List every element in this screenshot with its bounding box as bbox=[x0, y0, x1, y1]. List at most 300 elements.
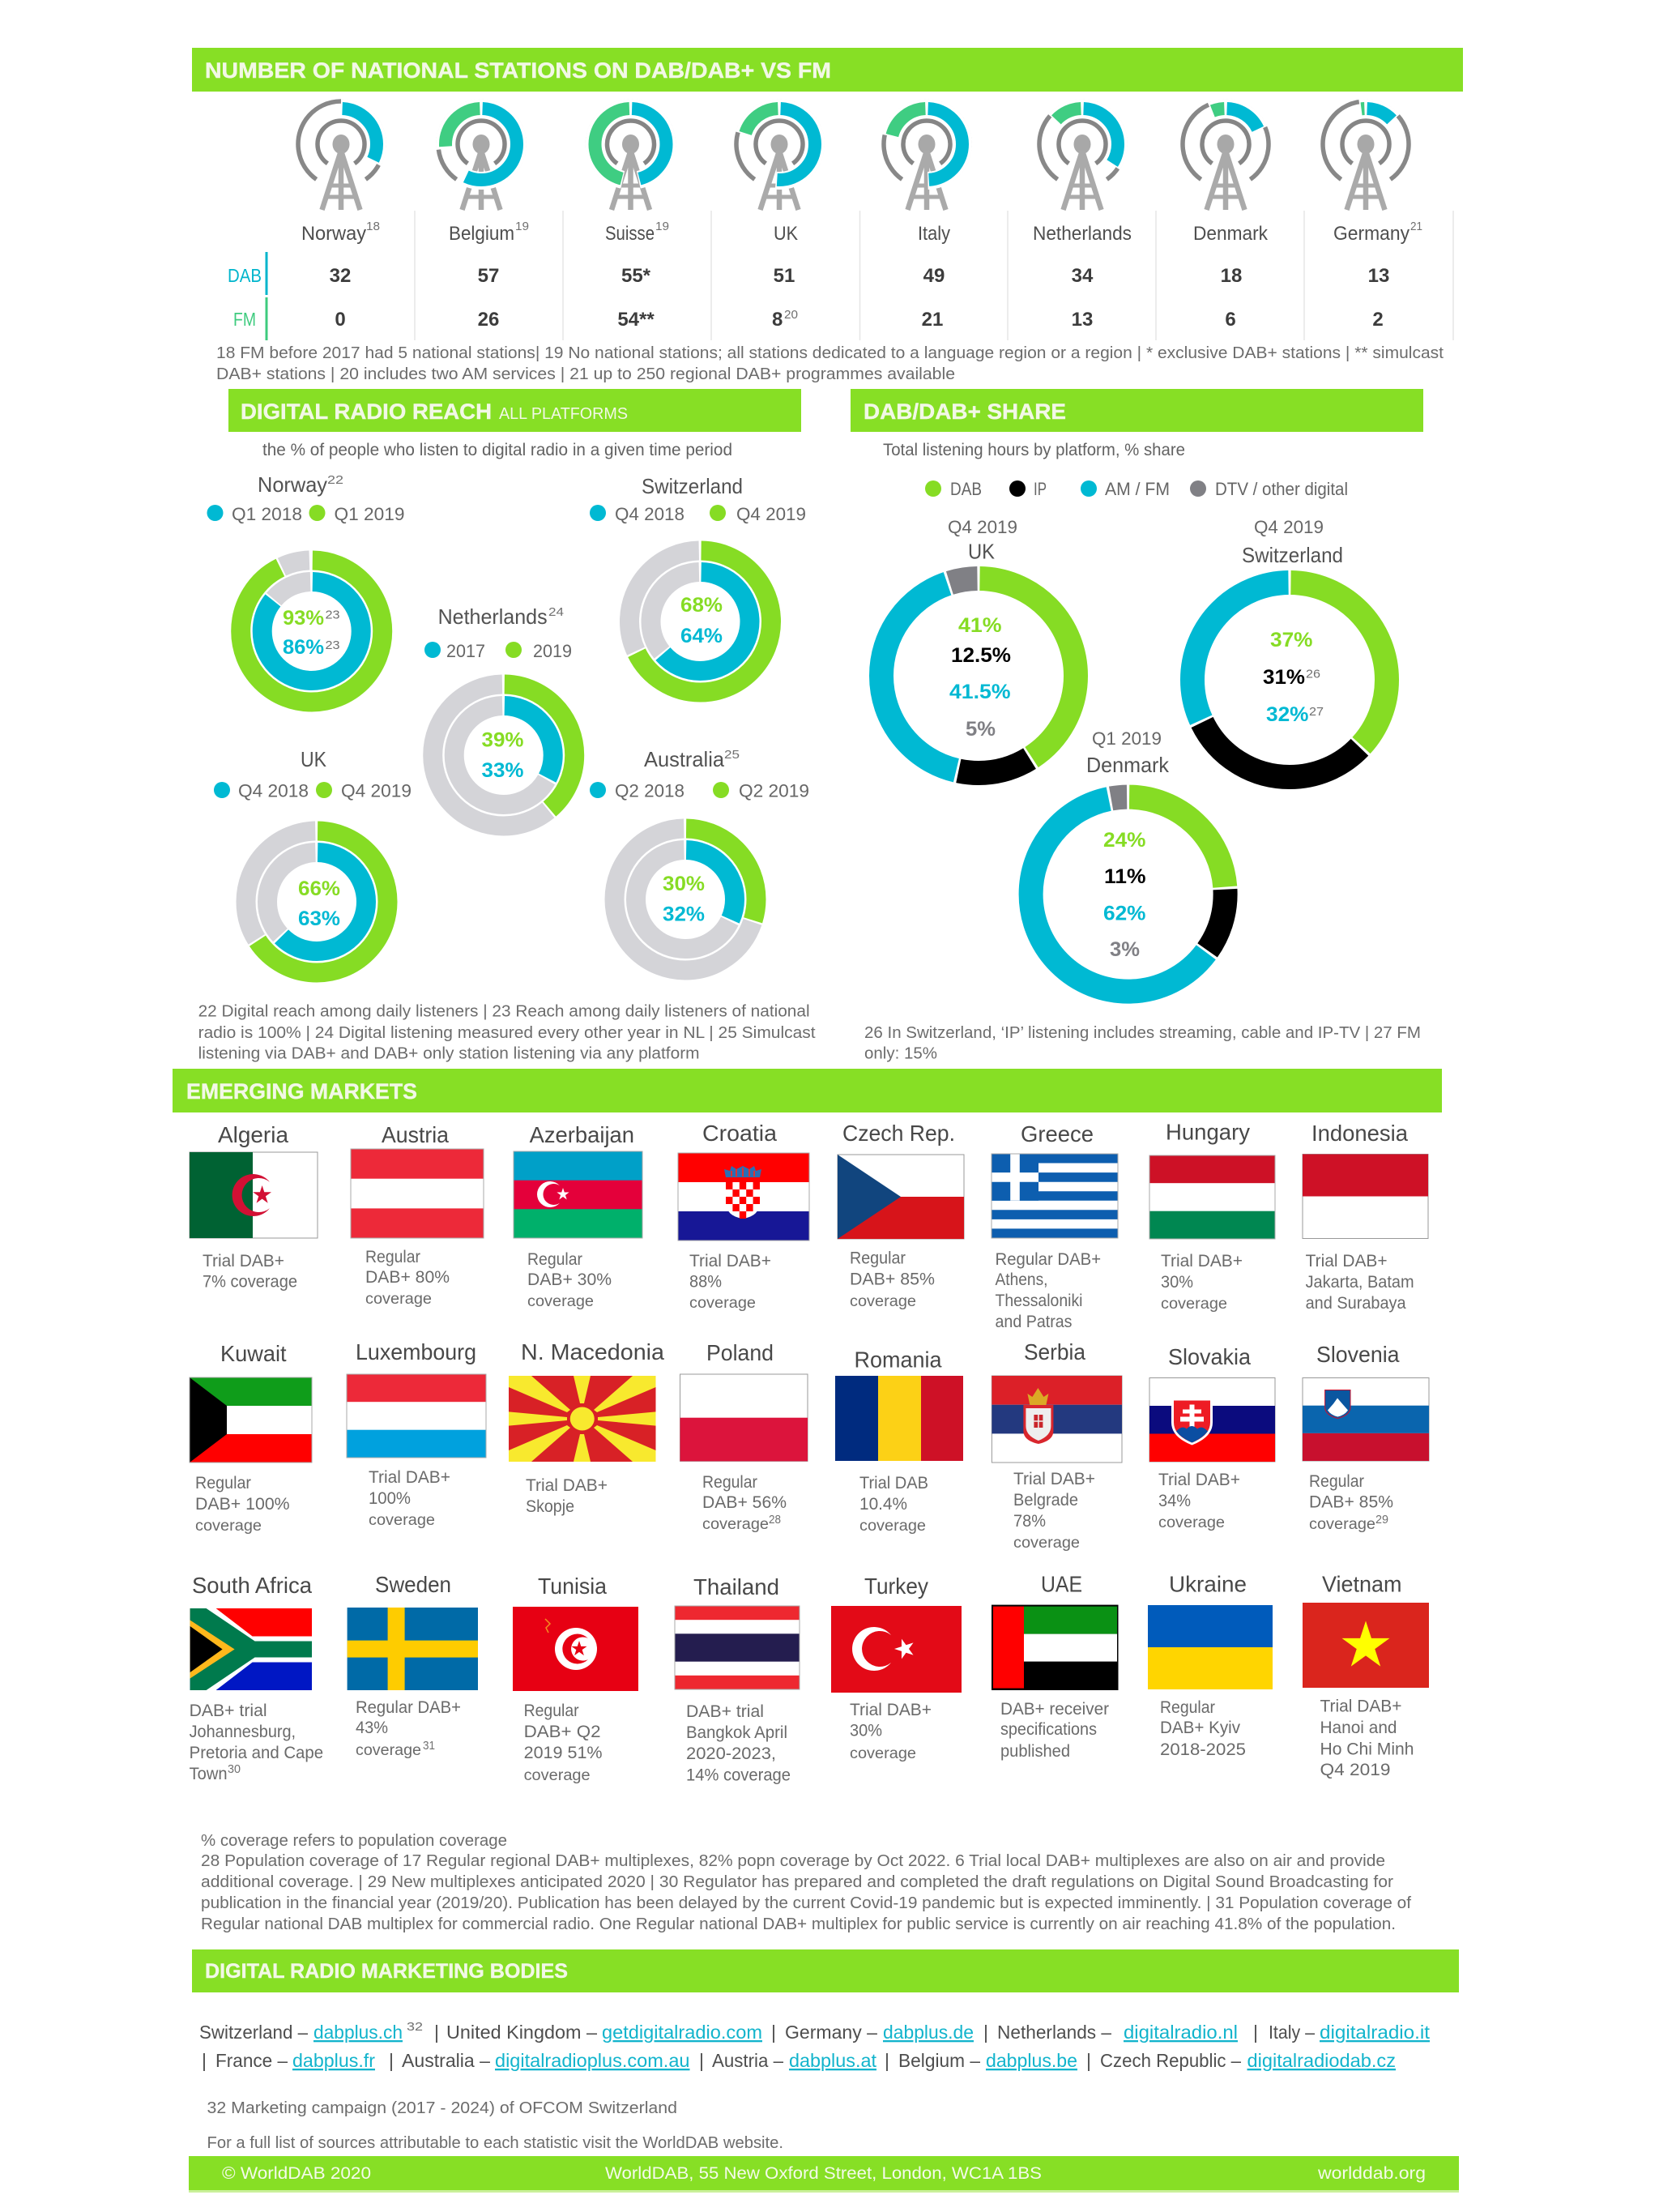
footnote: marketing: 32 Marketing campaign (2017 - 2024) of OFCOM Switzerland bbox=[207, 2099, 677, 2117]
chart: Switzerland reach: Q4 2019 bbox=[736, 504, 806, 524]
market: Azerbaijan: coverage bbox=[527, 1293, 594, 1310]
market: Turkey: Trial DAB+ bbox=[850, 1701, 932, 1719]
chart: Australia bbox=[590, 747, 809, 971]
DAB values: 57 bbox=[478, 265, 499, 287]
FM values: 21 bbox=[922, 309, 943, 331]
market: Poland: Regular bbox=[702, 1473, 757, 1492]
country labels row: Germany bbox=[1333, 223, 1410, 245]
links row one: Switzerland – bbox=[199, 2022, 308, 2043]
market: Austria: Austria bbox=[382, 1122, 449, 1147]
market: Romania: Trial DAB bbox=[859, 1474, 928, 1492]
market: Thailand: 2020-2023, bbox=[686, 1744, 776, 1763]
heading: national stations: NUMBER OF NATIONAL STATIONS ON DAB/DAB+ VS FM bbox=[205, 58, 831, 83]
chart: UK reach: Q4 2019 bbox=[341, 781, 412, 801]
market: Czech Republic: Czech Rep. bbox=[842, 1121, 955, 1146]
links row one: dabplus.de bbox=[883, 2022, 974, 2043]
chart: UK reach: UK bbox=[301, 747, 327, 771]
DAB values: 49 bbox=[923, 265, 945, 287]
chart: Netherlands: 24 bbox=[548, 605, 564, 619]
market: Slovakia bbox=[1149, 1344, 1275, 1531]
chart: Norway: Norway bbox=[258, 472, 327, 497]
market: N. Macedonia: Skopje bbox=[526, 1497, 574, 1516]
market: Austria: Regular bbox=[365, 1248, 420, 1266]
market: Serbia: 78% bbox=[1013, 1512, 1046, 1531]
market: South Africa: Pretoria and Cape bbox=[190, 1744, 323, 1762]
chart: Denmark share: 24% bbox=[1103, 829, 1145, 852]
chart: UK reach: 63% bbox=[298, 907, 340, 930]
market: Tunisia: 2019 51% bbox=[524, 1744, 603, 1762]
chart: UK reach bbox=[214, 747, 412, 972]
market: Hungary bbox=[1149, 1120, 1275, 1313]
links row two: | bbox=[885, 2050, 889, 2071]
market: Tunisia bbox=[513, 1574, 638, 1784]
chart: Denmark share: Denmark bbox=[1086, 753, 1170, 777]
chart: Netherlands: 33% bbox=[481, 759, 523, 782]
panel: digital radio reach bbox=[198, 389, 816, 1063]
footnote: coverage: % coverage refers to population coverage bbox=[201, 1832, 507, 1850]
subtitle: reach: the % of people who listen to digital radio in a given time period bbox=[262, 441, 732, 459]
market: Kuwait: coverage bbox=[195, 1518, 262, 1535]
market: Indonesia: Jakarta, Batam bbox=[1306, 1273, 1414, 1292]
market: Hungary: Hungary bbox=[1166, 1120, 1250, 1144]
icon: tower Denmark bbox=[1183, 101, 1269, 210]
market: Thailand bbox=[675, 1574, 800, 1785]
market: Indonesia: and Surabaya bbox=[1306, 1294, 1406, 1313]
market: Luxembourg: Luxembourg bbox=[356, 1339, 476, 1364]
links row one: United Kingdom – bbox=[446, 2022, 597, 2043]
market: Tunisia: Tunisia bbox=[538, 1574, 607, 1599]
chart: Norway: Q1 2018 bbox=[232, 504, 302, 524]
market: Greece: Athens, bbox=[995, 1270, 1048, 1289]
market: Greece: Greece bbox=[1021, 1121, 1094, 1147]
chart: Switzerland reach: Switzerland bbox=[642, 474, 743, 498]
market: Turkey: 30% bbox=[850, 1721, 882, 1740]
market: UAE: published bbox=[1000, 1742, 1070, 1761]
footnote: reach: 22 Digital reach among daily listeners | 23 Reach among daily listeners of national bbox=[198, 1003, 810, 1021]
market: Vietnam: Q4 2019 bbox=[1320, 1761, 1390, 1779]
chart: Switzerland share: 26 bbox=[1306, 668, 1320, 681]
market: Kuwait bbox=[190, 1341, 312, 1535]
chart: UK reach: 66% bbox=[298, 878, 340, 900]
market: N. Macedonia bbox=[509, 1339, 664, 1516]
market: Slovakia: Slovakia bbox=[1168, 1344, 1251, 1369]
market: Czech Republic bbox=[838, 1121, 964, 1310]
links row two: | bbox=[1086, 2050, 1091, 2071]
market: Luxembourg bbox=[347, 1339, 486, 1529]
market: Slovenia: Regular bbox=[1309, 1472, 1364, 1491]
market: Croatia: coverage bbox=[689, 1295, 756, 1312]
FM values: 26 bbox=[478, 309, 499, 331]
market: Greece: Thessaloniki bbox=[995, 1292, 1082, 1310]
icon: tower Belgium bbox=[438, 101, 524, 210]
links row one: | bbox=[771, 2022, 776, 2043]
market: Thailand: 14% coverage bbox=[686, 1766, 791, 1785]
links row one: 32 bbox=[407, 2020, 423, 2034]
DAB values: 32 bbox=[330, 265, 351, 287]
DAB values: 18 bbox=[1221, 265, 1242, 287]
chart: Norway: 22 bbox=[327, 473, 343, 487]
market: Vietnam bbox=[1303, 1572, 1429, 1779]
row label: FM: FM bbox=[233, 309, 256, 330]
market: Algeria: Algeria bbox=[218, 1122, 288, 1147]
links row one: Germany – bbox=[785, 2022, 877, 2043]
chart: Norway: 23 bbox=[326, 609, 340, 622]
market: Romania: coverage bbox=[859, 1518, 926, 1535]
icon: tower Germany bbox=[1323, 101, 1409, 210]
links row two: Czech Republic – bbox=[1100, 2050, 1241, 2071]
chart: Switzerland share: Q4 2019 bbox=[1254, 517, 1324, 537]
market: Serbia: Belgrade bbox=[1013, 1491, 1078, 1510]
legend: platforms: AM / FM bbox=[1105, 479, 1170, 499]
chart: Denmark share: 11% bbox=[1104, 865, 1145, 888]
market: Luxembourg: 100% bbox=[369, 1489, 411, 1508]
market: South Africa: Johannesburg, bbox=[190, 1723, 296, 1741]
icon: tower UK bbox=[736, 101, 822, 210]
footer bar: WorldDAB, 55 New Oxford Street, London, WC1A 1BS bbox=[605, 2164, 1042, 2183]
market: Sweden: Sweden bbox=[375, 1572, 451, 1597]
country labels row: 18 bbox=[366, 220, 380, 233]
FM values: 54** bbox=[617, 309, 655, 331]
market: Kuwait: Regular bbox=[195, 1474, 251, 1492]
panel: emerging markets bbox=[173, 1069, 1442, 1933]
country labels row: 19 bbox=[515, 220, 529, 233]
footnote: coverage bbox=[201, 1832, 1411, 1933]
market: Sweden: 31 bbox=[423, 1739, 435, 1753]
market: Romania bbox=[835, 1347, 963, 1535]
market: Poland: Poland bbox=[706, 1340, 774, 1365]
country labels row: 21 bbox=[1410, 220, 1422, 233]
market: Slovakia: 34% bbox=[1158, 1492, 1191, 1510]
country labels row bbox=[301, 220, 1422, 245]
FM values: 8 bbox=[772, 309, 783, 331]
links row two: dabplus.be bbox=[986, 2050, 1077, 2071]
chart: Australia: 32% bbox=[663, 903, 705, 925]
legend: platforms: DAB bbox=[950, 479, 982, 499]
row label: DAB bbox=[228, 252, 267, 295]
market: Sweden bbox=[348, 1572, 478, 1759]
market: Austria: DAB+ 80% bbox=[365, 1268, 450, 1287]
links row one: dabplus.ch bbox=[313, 2022, 403, 2043]
chart: Netherlands bbox=[424, 604, 574, 826]
market: Slovenia: coverage bbox=[1309, 1516, 1375, 1533]
panel: DAB share bbox=[851, 389, 1423, 1063]
links row one: digitalradio.it bbox=[1320, 2022, 1431, 2043]
chart: Denmark share: 3% bbox=[1110, 938, 1140, 961]
market: Poland: 28 bbox=[769, 1513, 781, 1527]
footer bar bbox=[189, 2156, 1459, 2193]
market: N. Macedonia: N. Macedonia bbox=[521, 1339, 664, 1364]
footnote: coverage: publication in the financial year (2019/20). Publication has been delayed by the current Covid-19 pandemic but is expected imminently. | 31 Population coverage of bbox=[201, 1894, 1411, 1912]
chart: Norway: 86% bbox=[283, 636, 324, 659]
market: Vietnam: Hanoi and bbox=[1320, 1719, 1397, 1737]
chart: UK reach: Q4 2018 bbox=[238, 781, 309, 801]
chart: Switzerland reach: 64% bbox=[680, 625, 723, 647]
market: Slovenia bbox=[1303, 1342, 1429, 1533]
country labels row: Belgium bbox=[449, 223, 514, 245]
chart: Norway: 93% bbox=[283, 607, 324, 630]
links row two: | bbox=[202, 2050, 207, 2071]
sources note: For a full list of sources attributable to each statistic visit the WorldDAB website. bbox=[207, 2134, 783, 2152]
market: Turkey: Turkey bbox=[864, 1574, 928, 1599]
market: Greece: Regular DAB+ bbox=[995, 1250, 1101, 1269]
chart: Australia: Australia bbox=[644, 747, 725, 771]
heading: national stations bbox=[192, 48, 1463, 92]
panel: digital radio marketing bodies bbox=[192, 1949, 1459, 2152]
DAB values: 34 bbox=[1072, 265, 1094, 287]
market: Azerbaijan: DAB+ 30% bbox=[527, 1270, 612, 1289]
market: Croatia bbox=[678, 1121, 809, 1312]
market: Slovenia: 29 bbox=[1375, 1513, 1388, 1527]
footnote: reach bbox=[198, 1003, 816, 1063]
market: Romania: Romania bbox=[854, 1347, 942, 1373]
FM values: 6 bbox=[1225, 309, 1236, 331]
heading: digital radio reach: DIGITAL RADIO REACH bbox=[241, 399, 492, 424]
icon: tower Norway bbox=[298, 101, 384, 210]
chart: Australia: Q2 2019 bbox=[739, 781, 809, 801]
market: Poland: DAB+ 56% bbox=[702, 1493, 787, 1512]
country labels row: 19 bbox=[655, 220, 669, 233]
footnote: stations bbox=[216, 344, 1444, 383]
footnote: stations: DAB+ stations | 20 includes two AM services | 21 up to 250 regional DAB+ programmes available bbox=[216, 365, 955, 383]
footnote: coverage: Regular national DAB multiplex for commercial radio. One Regular national DAB+ multiplex for public service is currently on air reaching 41.8% of the population. bbox=[201, 1915, 1396, 1933]
footnote: coverage: additional coverage. | 29 New multiplexes anticipated 2020 | 30 Regulator has prepared and completed the draft regulations on Digital Sound Broadcasting for bbox=[201, 1873, 1393, 1891]
market: UAE: specifications bbox=[1000, 1720, 1097, 1739]
market: Algeria: 7% coverage bbox=[203, 1272, 297, 1292]
market: Indonesia bbox=[1303, 1121, 1428, 1313]
market: Hungary: coverage bbox=[1161, 1296, 1227, 1313]
chart: UK share: UK bbox=[968, 540, 996, 564]
chart: Norway: 23 bbox=[326, 638, 340, 652]
heading: emerging markets: EMERGING MARKETS bbox=[186, 1079, 417, 1104]
footnote: stations: 18 FM before 2017 had 5 national stations| 19 No national stations; all stations dedicated to a language region or a region | * exclusive DAB+ stations | ** simulcast bbox=[216, 344, 1444, 362]
footer bar: © WorldDAB 2020 bbox=[222, 2164, 371, 2183]
FM values: 2 bbox=[1372, 309, 1384, 331]
market: Serbia: coverage bbox=[1013, 1535, 1080, 1552]
market: Slovenia: DAB+ 85% bbox=[1309, 1492, 1393, 1511]
country labels row: Netherlands bbox=[1033, 223, 1132, 245]
FM values: 20 bbox=[784, 308, 798, 322]
market: Algeria: Trial DAB+ bbox=[203, 1252, 284, 1270]
market: Hungary: Trial DAB+ bbox=[1161, 1252, 1243, 1270]
market: N. Macedonia: Trial DAB+ bbox=[526, 1476, 608, 1495]
DAB values: 55* bbox=[621, 265, 651, 287]
market: UAE bbox=[992, 1572, 1118, 1761]
heading: marketing bodies: DIGITAL RADIO MARKETING BODIES bbox=[205, 1960, 568, 1983]
market: Vietnam: Ho Chi Minh bbox=[1320, 1740, 1414, 1758]
country labels row: Italy bbox=[918, 223, 950, 245]
chart: UK share bbox=[881, 517, 1076, 773]
chart: Switzerland share bbox=[1192, 517, 1387, 777]
links row two: France – bbox=[215, 2050, 288, 2071]
heading: emerging markets bbox=[173, 1069, 1442, 1112]
heading: marketing bodies bbox=[192, 1949, 1459, 1992]
chart: Denmark share: 62% bbox=[1103, 903, 1145, 925]
chart: UK share: 41% bbox=[958, 614, 1001, 637]
market: Croatia: Trial DAB+ bbox=[689, 1252, 771, 1270]
DAB values: 51 bbox=[774, 265, 795, 287]
footnote: share bbox=[864, 1024, 1421, 1063]
heading: DAB share: DAB/DAB+ SHARE bbox=[864, 399, 1066, 424]
heading: DAB share bbox=[851, 389, 1423, 432]
country labels row: Denmark bbox=[1193, 223, 1269, 245]
market: Turkey: coverage bbox=[850, 1745, 916, 1762]
chart: UK share: 41.5% bbox=[949, 681, 1011, 703]
panel: number of national stations bbox=[192, 48, 1463, 383]
links row two: Austria – bbox=[712, 2050, 783, 2071]
market: Ukraine: 2018-2025 bbox=[1160, 1740, 1246, 1759]
market: Sweden: coverage bbox=[356, 1742, 421, 1759]
market: Thailand: Thailand bbox=[693, 1574, 779, 1599]
market: Czech Republic: Regular bbox=[850, 1249, 906, 1267]
market: Thailand: DAB+ trial bbox=[686, 1702, 764, 1721]
market: South Africa: DAB+ trial bbox=[190, 1702, 267, 1720]
market: Croatia: 88% bbox=[689, 1272, 722, 1292]
footer bar: worlddab.org bbox=[1317, 2164, 1426, 2183]
market: South Africa: South Africa bbox=[192, 1573, 312, 1598]
chart: Switzerland share: 27 bbox=[1309, 705, 1324, 719]
country labels row: UK bbox=[774, 223, 798, 245]
chart: Denmark share bbox=[1031, 728, 1226, 992]
market: Slovakia: Trial DAB+ bbox=[1158, 1471, 1240, 1489]
footnote: reach: listening via DAB+ and DAB+ only station listening via any platform bbox=[198, 1045, 700, 1063]
market: Serbia bbox=[992, 1339, 1122, 1552]
market: South Africa bbox=[190, 1573, 323, 1783]
FM values: 13 bbox=[1072, 309, 1093, 331]
legend: platforms: DTV / other digital bbox=[1215, 479, 1348, 499]
market: Vietnam: Trial DAB+ bbox=[1320, 1697, 1401, 1716]
chart: Netherlands: 39% bbox=[481, 729, 523, 752]
market: Greece: and Patras bbox=[995, 1313, 1073, 1331]
market: Azerbaijan: Azerbaijan bbox=[530, 1122, 634, 1147]
FM values bbox=[335, 308, 1384, 331]
market: Algeria bbox=[190, 1122, 318, 1292]
links row two bbox=[202, 2050, 1396, 2071]
market: South Africa: 30 bbox=[228, 1762, 241, 1776]
links row one bbox=[199, 2020, 1431, 2043]
country labels row: Norway bbox=[301, 223, 366, 245]
chart: Australia: 25 bbox=[724, 748, 740, 762]
chart: Norway: Q1 2019 bbox=[334, 504, 405, 524]
subtitle: share: Total listening hours by platform, % share bbox=[883, 441, 1185, 459]
icon: tower Suisse bbox=[588, 101, 674, 210]
footnote: share: 26 In Switzerland, ‘IP’ listening includes streaming, cable and IP-TV | 27 FM bbox=[864, 1024, 1421, 1042]
row label: DAB: DAB bbox=[228, 265, 262, 286]
chart: Switzerland reach: Q4 2018 bbox=[615, 504, 684, 524]
market: Azerbaijan bbox=[514, 1122, 642, 1310]
chart: Norway bbox=[207, 472, 405, 702]
links row two: | bbox=[699, 2050, 704, 2071]
chart: Switzerland share: 32% bbox=[1266, 703, 1309, 726]
footnote: reach: radio is 100% | 24 Digital listening measured every other year in NL | 25 Simulcast bbox=[198, 1024, 816, 1042]
chart: Switzerland share: 31% bbox=[1263, 666, 1305, 689]
chart: UK share: 5% bbox=[966, 718, 996, 741]
icon: tower Netherlands bbox=[1039, 101, 1125, 210]
DAB values: 13 bbox=[1368, 265, 1389, 287]
footnote: share: only: 15% bbox=[864, 1045, 937, 1063]
row label: FM bbox=[233, 297, 267, 340]
chart: Netherlands: 2019 bbox=[533, 641, 572, 661]
legend: platforms bbox=[925, 479, 1348, 499]
market: UAE: UAE bbox=[1041, 1572, 1082, 1596]
market: Serbia: Serbia bbox=[1024, 1339, 1085, 1364]
links row one: | bbox=[434, 2022, 439, 2043]
FM values: 0 bbox=[335, 309, 346, 331]
market: Slovakia: coverage bbox=[1158, 1514, 1225, 1531]
market: Czech Republic: coverage bbox=[850, 1293, 916, 1310]
market: Tunisia: Regular bbox=[524, 1702, 579, 1720]
links row two: digitalradioplus.com.au bbox=[495, 2050, 690, 2071]
market: Ukraine: Ukraine bbox=[1169, 1572, 1247, 1596]
links row two: dabplus.fr bbox=[292, 2050, 375, 2071]
market: Ukraine bbox=[1148, 1572, 1273, 1759]
market: Austria: coverage bbox=[365, 1291, 432, 1308]
market: Hungary: 30% bbox=[1161, 1273, 1193, 1292]
links row two: Australia – bbox=[402, 2050, 490, 2071]
DAB values bbox=[330, 265, 1389, 287]
market: Luxembourg: Trial DAB+ bbox=[369, 1468, 450, 1487]
market: Greece bbox=[992, 1121, 1118, 1331]
chart: Australia: 30% bbox=[663, 873, 705, 895]
market: Czech Republic: DAB+ 85% bbox=[850, 1270, 935, 1289]
market: Sweden: 43% bbox=[356, 1719, 388, 1737]
footnote: coverage: 28 Population coverage of 17 Regular regional DAB+ multiplexes, 82% popn coverage by Oct 2022. 6 Trial local DAB+ multiplexes are also on air and provide bbox=[201, 1852, 1385, 1870]
market: Serbia: Trial DAB+ bbox=[1013, 1470, 1095, 1488]
heading: digital radio reach: ALL PLATFORMS bbox=[499, 405, 628, 423]
chart: Switzerland share: 37% bbox=[1270, 629, 1312, 651]
links row two: digitalradiodab.cz bbox=[1247, 2050, 1396, 2071]
links row one: getdigitalradio.com bbox=[602, 2022, 762, 2043]
chart: Denmark share: Q1 2019 bbox=[1092, 728, 1162, 749]
chart: UK share: 12.5% bbox=[951, 644, 1011, 667]
chart: Netherlands: Netherlands bbox=[438, 604, 548, 629]
market: Thailand: Bangkok April bbox=[686, 1723, 787, 1742]
market: Sweden: Regular DAB+ bbox=[356, 1698, 461, 1717]
market: Ukraine: Regular bbox=[1160, 1698, 1215, 1717]
market: Slovenia: Slovenia bbox=[1316, 1342, 1400, 1367]
links row one: | bbox=[983, 2022, 988, 2043]
heading: digital radio reach bbox=[228, 389, 801, 432]
market: Azerbaijan: Regular bbox=[527, 1250, 582, 1269]
chart: Switzerland share: Switzerland bbox=[1242, 543, 1343, 567]
market: Kuwait: DAB+ 100% bbox=[195, 1495, 290, 1514]
market: Luxembourg: coverage bbox=[369, 1512, 435, 1529]
market: Indonesia: Trial DAB+ bbox=[1306, 1252, 1388, 1270]
chart: Australia: Q2 2018 bbox=[615, 781, 684, 801]
links row one: | bbox=[1253, 2022, 1258, 2043]
market: Poland: coverage bbox=[702, 1516, 769, 1533]
market: Austria bbox=[351, 1122, 484, 1308]
links row two: dabplus.at bbox=[789, 2050, 877, 2071]
chart: Switzerland reach: 68% bbox=[680, 594, 723, 617]
links row one: Italy – bbox=[1269, 2022, 1315, 2043]
chart: Netherlands: 2017 bbox=[446, 641, 485, 661]
chart: UK share: Q4 2019 bbox=[948, 517, 1017, 537]
market: South Africa: Town bbox=[190, 1765, 228, 1783]
market: Romania: 10.4% bbox=[859, 1495, 907, 1514]
links row two: | bbox=[389, 2050, 394, 2071]
market: Poland bbox=[680, 1340, 808, 1533]
chart: Switzerland reach bbox=[590, 474, 806, 692]
market: Tunisia: DAB+ Q2 bbox=[524, 1723, 601, 1741]
market: Vietnam: Vietnam bbox=[1322, 1572, 1401, 1596]
market: Indonesia: Indonesia bbox=[1311, 1121, 1408, 1146]
legend: platforms: IP bbox=[1034, 479, 1047, 499]
market: Turkey bbox=[831, 1574, 962, 1762]
market: Croatia: Croatia bbox=[702, 1121, 777, 1146]
market: UAE: DAB+ receiver bbox=[1000, 1700, 1109, 1719]
links row one: digitalradio.nl bbox=[1124, 2022, 1238, 2043]
icon: tower Italy bbox=[884, 101, 970, 210]
